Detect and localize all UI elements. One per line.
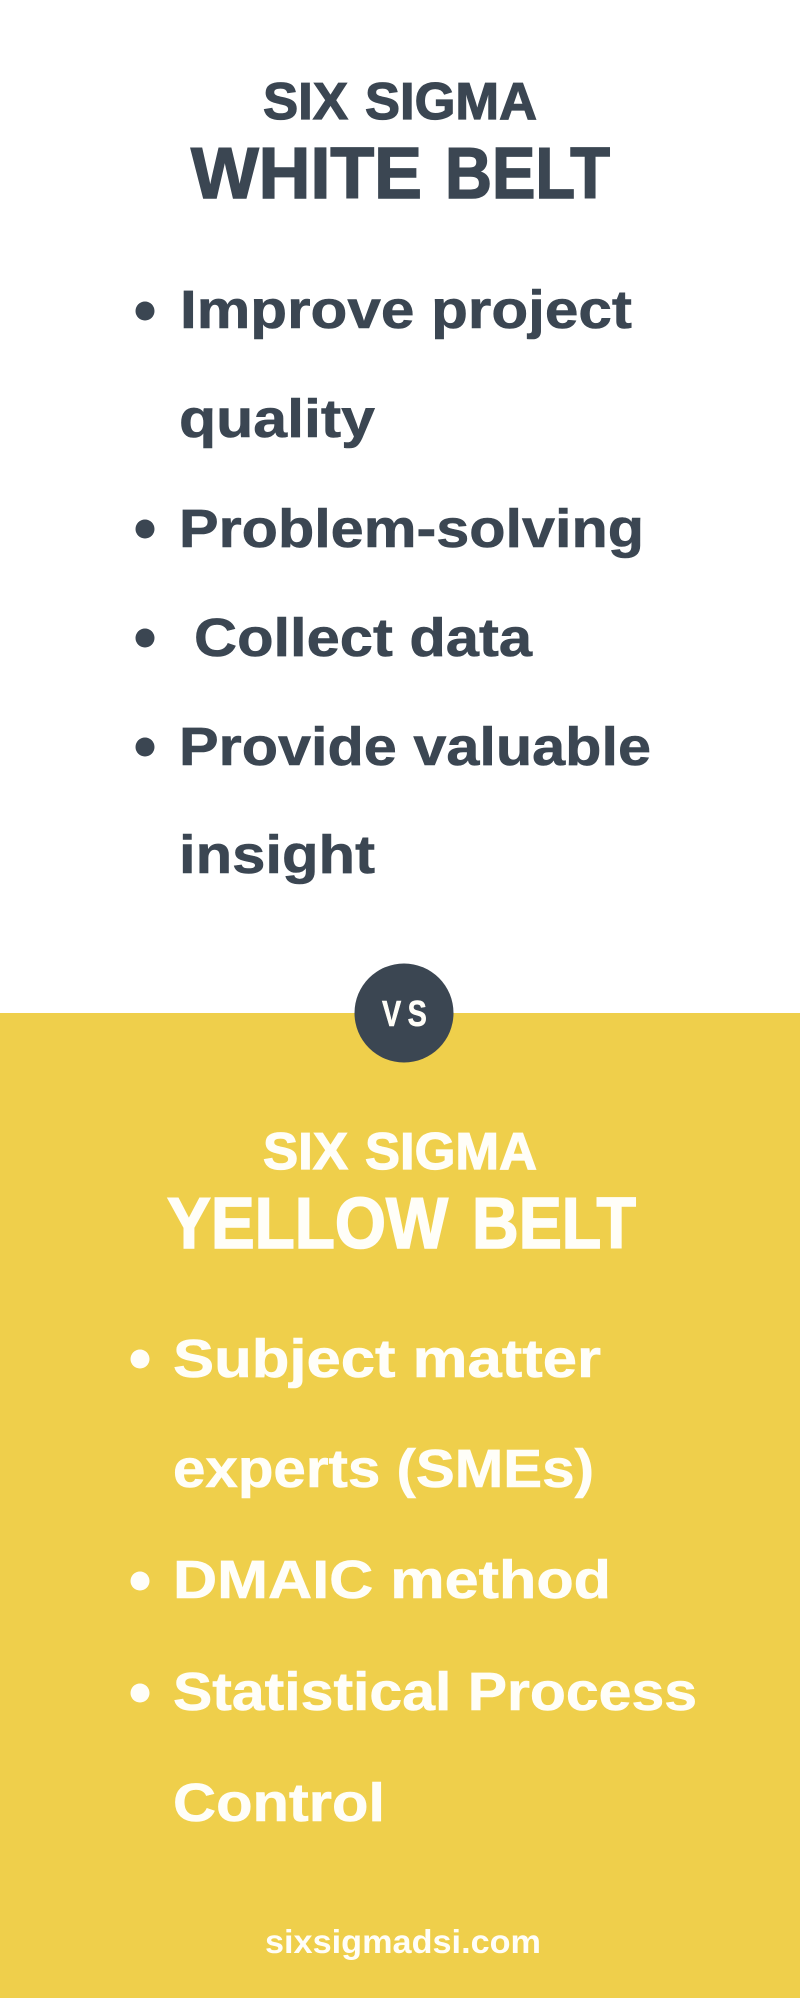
item: provide valuable insight: Provide valuable	[179, 717, 651, 777]
heading: six sigma white belt: WHITE	[191, 134, 422, 214]
footer: website: sixsigmadsi.com	[265, 1923, 541, 1960]
item: subject matter experts: experts (SMEs)	[173, 1439, 594, 1499]
heading: six sigma yellow belt: SIGMA	[365, 1123, 537, 1181]
item: statistical process control	[130, 1662, 697, 1833]
item: collect data: Collect data	[194, 608, 533, 668]
heading: six sigma yellow belt: BELT	[472, 1184, 636, 1264]
list: yellow belt points	[130, 1329, 697, 1833]
heading: six sigma white belt: BELT	[445, 134, 610, 214]
item: problem-solving: Problem-solving	[179, 499, 644, 559]
heading: six sigma white belt	[191, 73, 610, 214]
heading: six sigma yellow belt	[167, 1123, 636, 1264]
heading: six sigma yellow belt: SIX	[263, 1123, 348, 1181]
badge: vs circle	[354, 964, 454, 1062]
item: subject matter experts	[130, 1329, 601, 1499]
item: improve project quality: Improve project	[180, 280, 632, 340]
item: provide valuable insight	[136, 717, 651, 885]
item: improve project quality: quality	[179, 389, 375, 449]
item: improve project quality	[136, 280, 632, 449]
heading: six sigma yellow belt: YELLOW	[167, 1184, 448, 1264]
item: statistical process control: Control	[173, 1773, 385, 1833]
panel: yellow belt	[0, 1013, 800, 1998]
item: subject matter experts: Subject matter	[173, 1329, 601, 1389]
item: statistical process control: Statistical Process	[173, 1662, 697, 1722]
badge: vs circle: VS	[382, 993, 427, 1034]
item: provide valuable insight: insight	[179, 825, 375, 885]
heading: six sigma white belt: SIGMA	[365, 73, 537, 131]
heading: six sigma white belt: SIX	[263, 73, 348, 131]
panel: white belt	[0, 0, 800, 1013]
item: dmaic method: DMAIC method	[173, 1550, 611, 1610]
list: white belt points	[136, 280, 651, 885]
